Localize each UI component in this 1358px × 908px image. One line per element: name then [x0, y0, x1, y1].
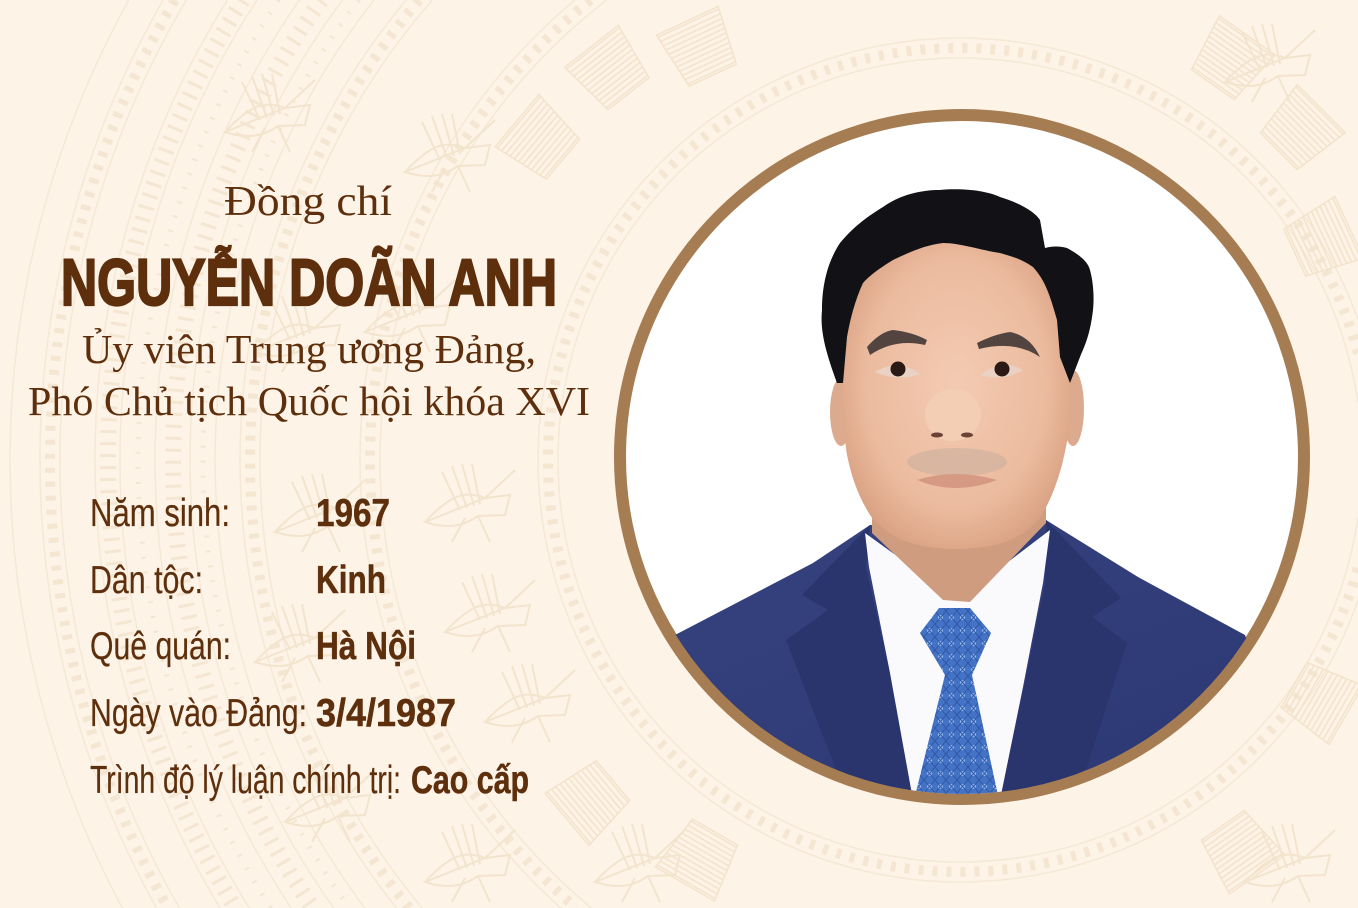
position line 2: Phó Chủ tịch Quốc hội khóa XVI — [28, 378, 590, 424]
neck — [872, 505, 1046, 602]
eyes — [875, 362, 1023, 378]
party admission label: Ngày vào Đảng: — [90, 692, 307, 735]
birth year value: 1967 — [316, 492, 390, 535]
portrait — [620, 115, 1304, 800]
eyebrows — [867, 330, 927, 355]
political theory label: Trình độ lý luận chính trị: — [90, 759, 401, 802]
hometown value: Hà Nội — [316, 625, 416, 668]
suit — [676, 520, 1246, 790]
birth year label: Năm sinh: — [90, 492, 230, 535]
hometown label: Quê quán: — [90, 625, 231, 668]
lapel left — [786, 525, 914, 795]
nose — [925, 397, 981, 441]
name heading: NGUYỄN DOÃN ANH — [61, 245, 557, 319]
political theory value: Cao cấp — [411, 759, 529, 802]
shirt — [865, 530, 1050, 800]
position line 1: Ủy viên Trung ương Đảng, — [82, 326, 536, 372]
lapel right — [1000, 520, 1127, 795]
ethnicity value: Kinh — [316, 559, 386, 602]
title: Đồng chí: Đồng chí — [224, 179, 392, 225]
hair — [822, 189, 1094, 383]
tie — [914, 608, 999, 800]
ethnicity label: Dân tộc: — [90, 559, 203, 602]
ears — [830, 381, 846, 446]
face — [842, 232, 1071, 549]
personal details — [90, 492, 529, 802]
mouth — [917, 474, 997, 488]
stubble — [907, 448, 1007, 476]
party admission value: 3/4/1987 — [316, 692, 456, 735]
